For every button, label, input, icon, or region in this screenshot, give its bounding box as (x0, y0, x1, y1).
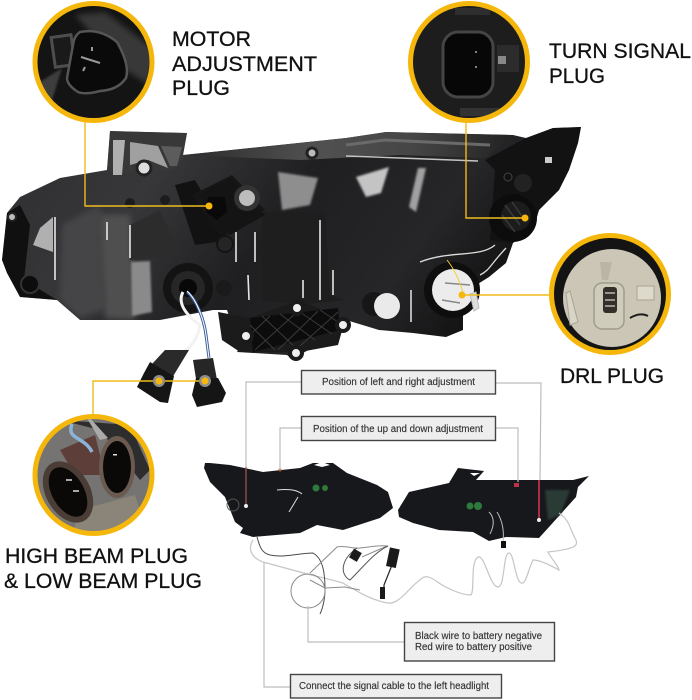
label: motor adjustment plug: MOTOR (172, 28, 251, 51)
circle: high and low beam plug photo (32, 414, 154, 536)
DRL socket (362, 260, 480, 322)
label: turn signal plug: TURN SIGNAL (549, 40, 691, 63)
label: turn signal plug: PLUG (549, 65, 605, 88)
callout line: motor adjustment plug (85, 122, 212, 210)
note: battery wires: Black wire to battery negative (415, 631, 542, 642)
label: motor adjustment plug: ADJUSTMENT (172, 53, 317, 76)
wiring harness (250, 513, 576, 614)
circle: turn signal plug photo (405, 0, 535, 125)
label: motor adjustment plug (172, 28, 317, 100)
callout line: DRL plug (458, 292, 549, 298)
circle: motor adjustment plug photo (30, 0, 160, 125)
label: high beam and low beam plug (4, 545, 202, 593)
note: battery wires: Red wire to battery positive (415, 642, 532, 653)
leader lines: adjustment positions (246, 382, 541, 482)
wiring diagram: left small headlight (204, 462, 393, 537)
note: up and down adjustment (302, 416, 496, 440)
callout line: beam plugs (93, 375, 211, 414)
turn signal socket (420, 157, 552, 275)
high and low beam cable plugs (137, 291, 226, 407)
note: signal cable (290, 674, 502, 698)
note: battery wires (404, 622, 554, 661)
headlight vent grille (218, 300, 349, 359)
leader lines: battery and signal cable (264, 563, 404, 687)
label: DRL plug: DRL PLUG (560, 365, 664, 388)
circle: DRL plug photo (549, 233, 671, 355)
wiring diagram: right small headlight (398, 468, 589, 548)
note: left and right adjustment (302, 370, 496, 394)
note: left and right adjustment: Position of left and right adjustment (322, 377, 475, 388)
label: high beam and low beam plug: & LOW BEAM PLUG (4, 570, 202, 593)
callout line: turn signal plug (466, 122, 528, 222)
main headlight rear view (2, 127, 581, 360)
note: up and down adjustment: Position of the up and down adjustment (313, 424, 483, 435)
cable grommet (163, 263, 232, 313)
note: signal cable: Connect the signal cable to the left headlight (299, 681, 489, 692)
label: motor adjustment plug: PLUG (172, 77, 230, 100)
label: high beam and low beam plug: HIGH BEAM PLUG (5, 545, 188, 568)
label: turn signal plug (549, 40, 691, 88)
